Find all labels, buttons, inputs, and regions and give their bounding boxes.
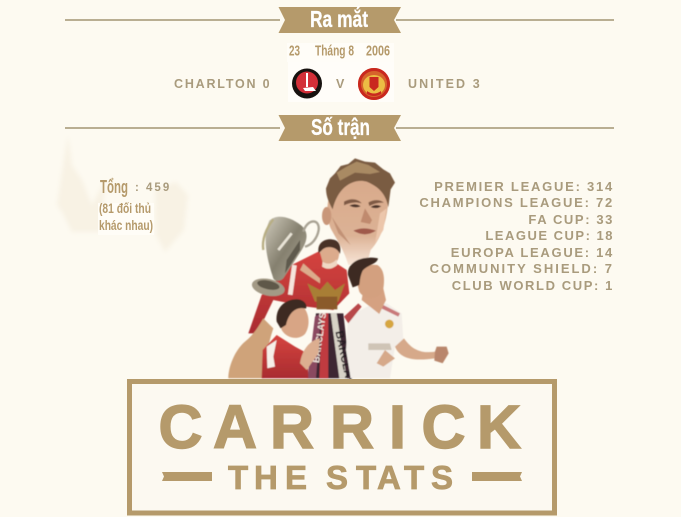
date panel: 2006: [366, 44, 390, 60]
subtitle: THE STATS: [228, 459, 453, 496]
header: Số trận: [65, 114, 614, 141]
total matches text: khác nhau): [99, 217, 153, 233]
total matches text: [98, 177, 171, 235]
total matches text: Tổng: [100, 177, 128, 197]
date panel: Tháng 8: [315, 44, 354, 60]
icon: Charlton crest: [292, 68, 322, 98]
competition appearances list: COMMUNITY SHIELD: 7: [430, 261, 614, 276]
header: Ra mắt: [65, 5, 614, 33]
Champions League trophy: [250, 217, 319, 299]
match result: CHARLTON 0: [174, 77, 271, 91]
date panel: 23: [289, 44, 300, 60]
title box: Carrick the stats: [130, 382, 554, 513]
competition appearances list: [419, 179, 614, 293]
icon: United crest: [358, 68, 390, 100]
Premier League trophy with banners: BARCLAYS: [332, 330, 357, 393]
total matches text: : 459: [135, 182, 171, 194]
match result: UNITED 3: [408, 77, 482, 91]
header: Số trận: Số trận: [311, 114, 370, 140]
competition appearances list: CHAMPIONS LEAGUE: 72: [419, 195, 614, 210]
total matches text: (81 đối thủ: [99, 200, 151, 216]
competition appearances list: FA CUP: 33: [528, 212, 614, 227]
match result: [174, 62, 482, 102]
white kit player: [344, 258, 449, 378]
player illustration collage: [228, 158, 449, 393]
subtitle: [162, 459, 522, 496]
red shirt player with trophy: [248, 239, 349, 333]
large portrait: [322, 158, 395, 265]
match result: V: [336, 77, 345, 91]
Premier League trophy with banners: [307, 282, 357, 393]
competition appearances list: EUROPA LEAGUE: 14: [451, 245, 614, 260]
kneeling player kissing trophy: [228, 299, 320, 378]
faint trophy-shaped background mark: [57, 135, 188, 252]
Premier League trophy with banners: BARCLAYS: [311, 312, 328, 364]
date panel: [287, 43, 394, 62]
competition appearances list: LEAGUE CUP: 18: [485, 228, 614, 243]
competition appearances list: PREMIER LEAGUE: 314: [434, 179, 614, 194]
title box: Carrick the stats: CARRICK: [158, 393, 521, 461]
header: Ra mắt: Ra mắt: [310, 5, 368, 32]
competition appearances list: CLUB WORLD CUP: 1: [452, 278, 614, 293]
